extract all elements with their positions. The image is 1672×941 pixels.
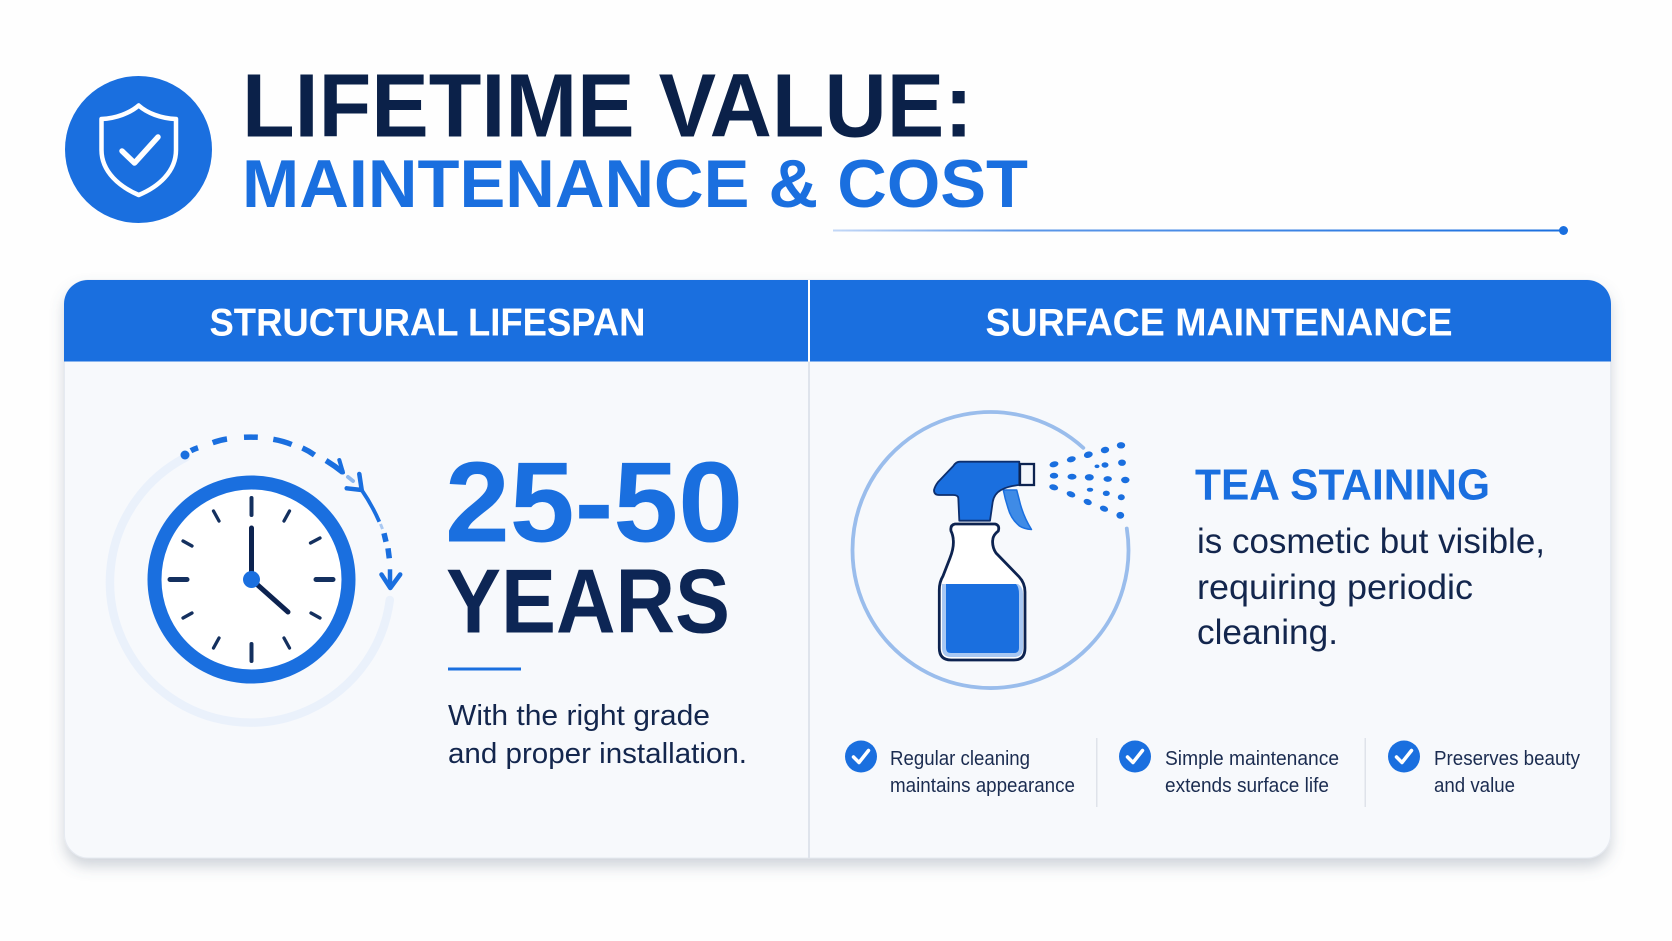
text: tea staining: is cosmetic but visible,	[1197, 522, 1545, 561]
heading: surface maintenance: SURFACE MAINTENANCE	[986, 302, 1452, 344]
heading: structural lifespan: STRUCTURAL LIFESPAN	[210, 302, 646, 344]
title	[242, 56, 1028, 222]
benefit separator	[1096, 738, 1098, 807]
title accent line	[833, 226, 1568, 235]
sprayer head	[934, 462, 1019, 521]
spray dots	[1049, 442, 1130, 519]
icon: shield badge	[65, 76, 212, 223]
text: tea staining: TEA STAINING	[1195, 460, 1490, 510]
stat: 25-50 years: YEARS	[446, 552, 730, 652]
benefit: preserves beauty	[1388, 740, 1580, 797]
benefit: regular cleaning	[845, 740, 1075, 797]
benefit: simple maintenance: Simple maintenance	[1165, 748, 1339, 770]
stat: 25-50 years	[445, 440, 743, 652]
stat: 25-50 years: 25-50	[445, 440, 743, 566]
benefit: regular cleaning: maintains appearance	[890, 775, 1075, 797]
text: tea staining	[1195, 460, 1545, 652]
text: tea staining: cleaning.	[1197, 613, 1338, 652]
panel divider	[808, 280, 810, 858]
panel header band	[64, 280, 1611, 362]
text: lifespan note: and proper installation.	[448, 738, 747, 770]
text: lifespan note	[448, 700, 747, 770]
icon: spray bottle	[852, 412, 1130, 688]
benefit: preserves beauty: Preserves beauty	[1434, 748, 1580, 770]
benefit separator	[1364, 738, 1366, 807]
benefit: simple maintenance	[1119, 740, 1339, 797]
sprayer nozzle	[1020, 464, 1034, 485]
title: MAINTENANCE & COST	[242, 146, 1028, 222]
title: LIFETIME VALUE:	[242, 56, 973, 156]
panel: comparison card	[64, 280, 1611, 858]
bottle body	[939, 524, 1025, 660]
benefit: regular cleaning: Regular cleaning	[890, 748, 1030, 770]
text: lifespan note: With the right grade	[448, 700, 710, 732]
benefit: preserves beauty: and value	[1434, 775, 1515, 797]
sprayer trigger	[1003, 490, 1032, 530]
stat underline	[448, 668, 521, 670]
text: tea staining: requiring periodic	[1197, 568, 1473, 607]
icon: clock with lifespan arc	[110, 437, 400, 723]
benefit: simple maintenance: extends surface life	[1165, 775, 1329, 797]
bottle liquid	[942, 584, 1023, 657]
